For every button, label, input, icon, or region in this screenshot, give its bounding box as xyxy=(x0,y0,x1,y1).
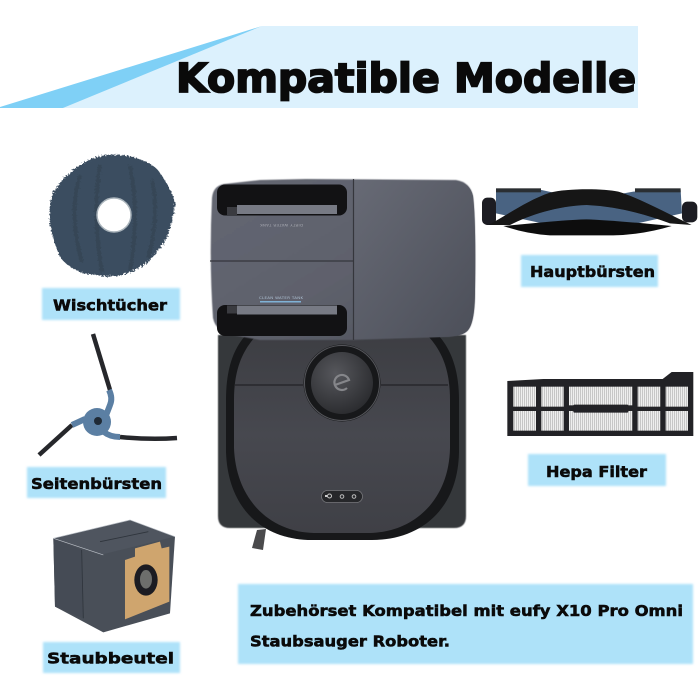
banner accent wedge xyxy=(0,26,262,108)
HEPA filter xyxy=(507,372,693,436)
dirty water tank window xyxy=(217,184,347,216)
lid seams xyxy=(210,179,354,340)
bag folds xyxy=(82,532,148,618)
side brush bristles under robot xyxy=(252,529,266,550)
body seam lines xyxy=(235,384,448,386)
label: Staubbeutel: Staubbeutel xyxy=(47,650,174,668)
lidar turret xyxy=(304,344,380,422)
label: Hauptbürsten: Hauptbürsten xyxy=(530,263,655,281)
brush core xyxy=(496,190,682,225)
station base plate xyxy=(218,335,466,528)
mop fibre shading xyxy=(74,165,155,272)
compatibility note xyxy=(238,584,693,664)
robot vacuum with station xyxy=(210,179,475,550)
water tank station lid xyxy=(211,179,475,340)
dust bag xyxy=(53,520,175,632)
brush upper bristles xyxy=(488,189,692,225)
note line 1: Zubehörset Kompatibel mit eufy X10 Pro Omni xyxy=(250,602,683,620)
brush end caps xyxy=(496,188,541,192)
note line 2: Staubsauger Roboter. xyxy=(250,632,450,650)
brush hub xyxy=(83,408,111,436)
dirty water tank label: DIRTY WATER TANK xyxy=(260,223,303,228)
header banner xyxy=(0,26,638,108)
robot body xyxy=(234,336,450,533)
clean water tank label: CLEAN WATER TANK xyxy=(259,295,303,300)
right lid panel xyxy=(354,180,475,339)
brush arms xyxy=(72,390,120,437)
filter cells xyxy=(513,387,536,407)
bag left panel xyxy=(53,538,83,618)
collar opening xyxy=(134,564,158,596)
cardboard collar xyxy=(125,542,169,619)
label: Seitenbürsten xyxy=(27,467,166,498)
main brush xyxy=(482,188,697,235)
mop pad xyxy=(49,155,175,276)
title: Kompatible Modelle xyxy=(176,56,636,102)
filter handle xyxy=(573,405,628,413)
clean tank blue marker xyxy=(260,301,301,302)
mop centre hole xyxy=(97,198,131,232)
bag top flap xyxy=(53,520,175,555)
robot bumper xyxy=(226,335,459,540)
side brush xyxy=(39,334,177,455)
label: Hepa Filter: Hepa Filter xyxy=(546,463,647,481)
logo xyxy=(334,375,349,390)
label: Hauptbürsten xyxy=(521,255,658,287)
label: Seitenbürsten: Seitenbürsten xyxy=(31,475,162,493)
label: Staubbeutel xyxy=(43,642,180,673)
label: Wischtücher xyxy=(42,288,180,320)
control panel xyxy=(322,490,362,502)
label: Hepa Filter xyxy=(528,454,666,486)
label: Wischtücher: Wischtücher xyxy=(53,296,167,314)
clean water tank window xyxy=(217,305,347,336)
brush lower bristles xyxy=(503,219,672,235)
